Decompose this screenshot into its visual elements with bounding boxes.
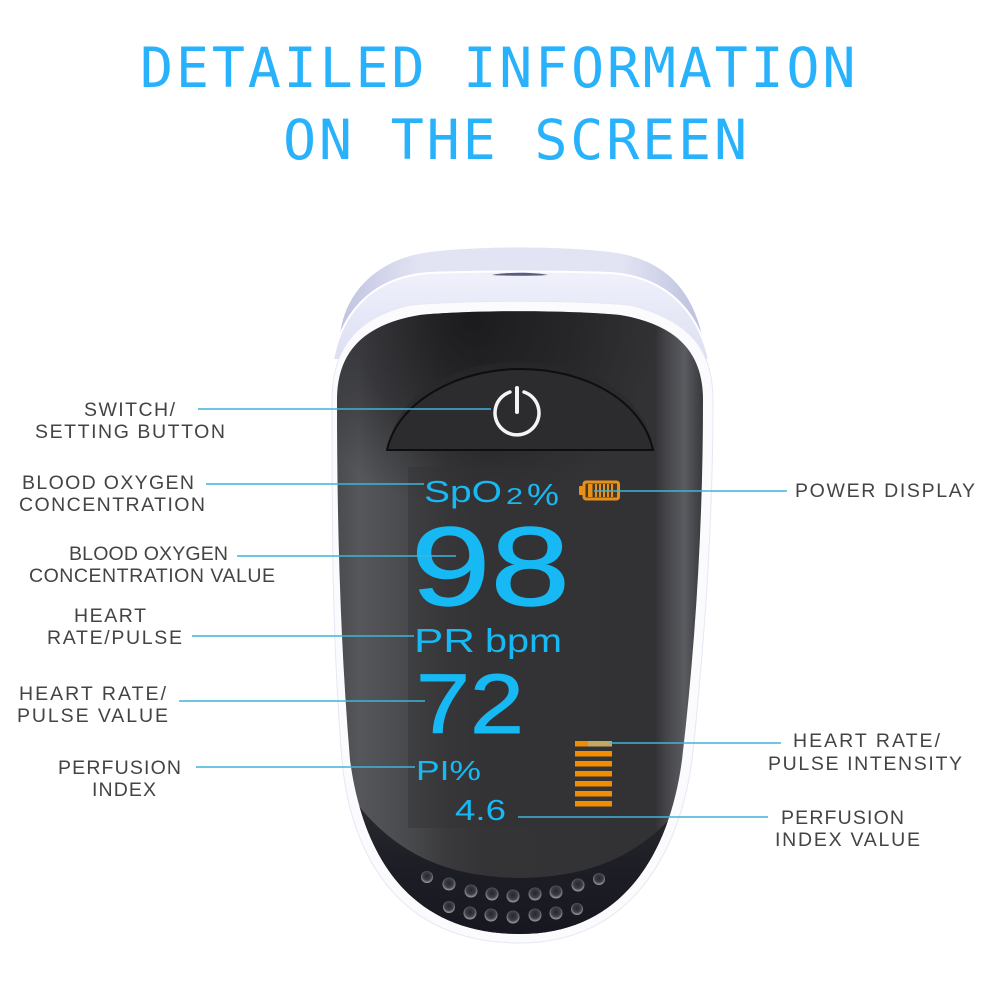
callout: blood oxygen concentration value: BLOOD OXYGEN [69,543,228,565]
callout: blood oxygen concentration value: CONCENTRATION VALUE [29,565,275,587]
callout: perfusion index: PERFUSION [58,757,181,779]
speaker dots [421,871,605,924]
callout: heart rate/pulse intensity: PULSE INTENSITY [768,753,962,775]
icon: power [495,388,539,435]
callout: perfusion index value: PERFUSION [781,807,904,829]
face lower shading [360,807,668,934]
callout: perfusion index value [518,807,920,851]
device upper band [333,272,709,360]
reading: 98: 98 [411,504,570,629]
callout: power display: POWER DISPLAY [795,480,975,502]
reading: SpO: SpO [424,474,502,509]
device black face [337,305,703,940]
title [140,36,858,172]
battery icon [579,482,618,499]
callout: blood oxygen concentration value [29,543,456,587]
title: ON THE SCREEN [283,108,750,172]
callout: heart rate/pulse value: PULSE VALUE [17,705,168,727]
callout: heart rate/pulse intensity [610,730,962,775]
reading: bpm: bpm [485,622,562,659]
device white body [332,301,713,943]
power button [387,362,653,450]
callout: perfusion index value: INDEX VALUE [775,829,920,851]
device top clip [340,248,702,335]
callout: heart rate/pulse: HEART [74,605,146,627]
reading: 72: 72 [416,657,524,751]
callout: heart rate/pulse value: HEART RATE/ [19,683,167,705]
face top shading [337,311,638,468]
callout: blood oxygen concentration [19,472,424,516]
callout: heart rate/pulse intensity: HEART RATE/ [793,730,941,752]
callout: blood oxygen concentration: CONCENTRATION [19,494,205,516]
title: DETAILED INFORMATION [140,36,858,100]
pulse intensity bars [575,741,612,806]
reading: 4.6: 4.6 [455,795,506,827]
pulse oximeter device [332,248,713,943]
callout: heart rate/pulse [47,605,414,649]
callout: perfusion index: INDEX [92,779,156,801]
screen panel [408,467,625,828]
callout: heart rate/pulse value [17,683,425,727]
callout: perfusion index [58,757,415,801]
callout: blood oxygen concentration: BLOOD OXYGEN [22,472,194,494]
reading: PR: PR [414,622,475,659]
callout: switch/setting button: SETTING BUTTON [35,421,225,443]
reading: PI%: PI% [416,755,481,786]
callout: heart rate/pulse: RATE/PULSE [47,627,182,649]
device top slit [492,273,548,276]
reading: percent: % [527,477,559,512]
callout: switch/setting button: SWITCH/ [84,399,176,421]
callout: switch/setting button [35,399,491,443]
reading: subscript 2: 2 [506,483,523,509]
